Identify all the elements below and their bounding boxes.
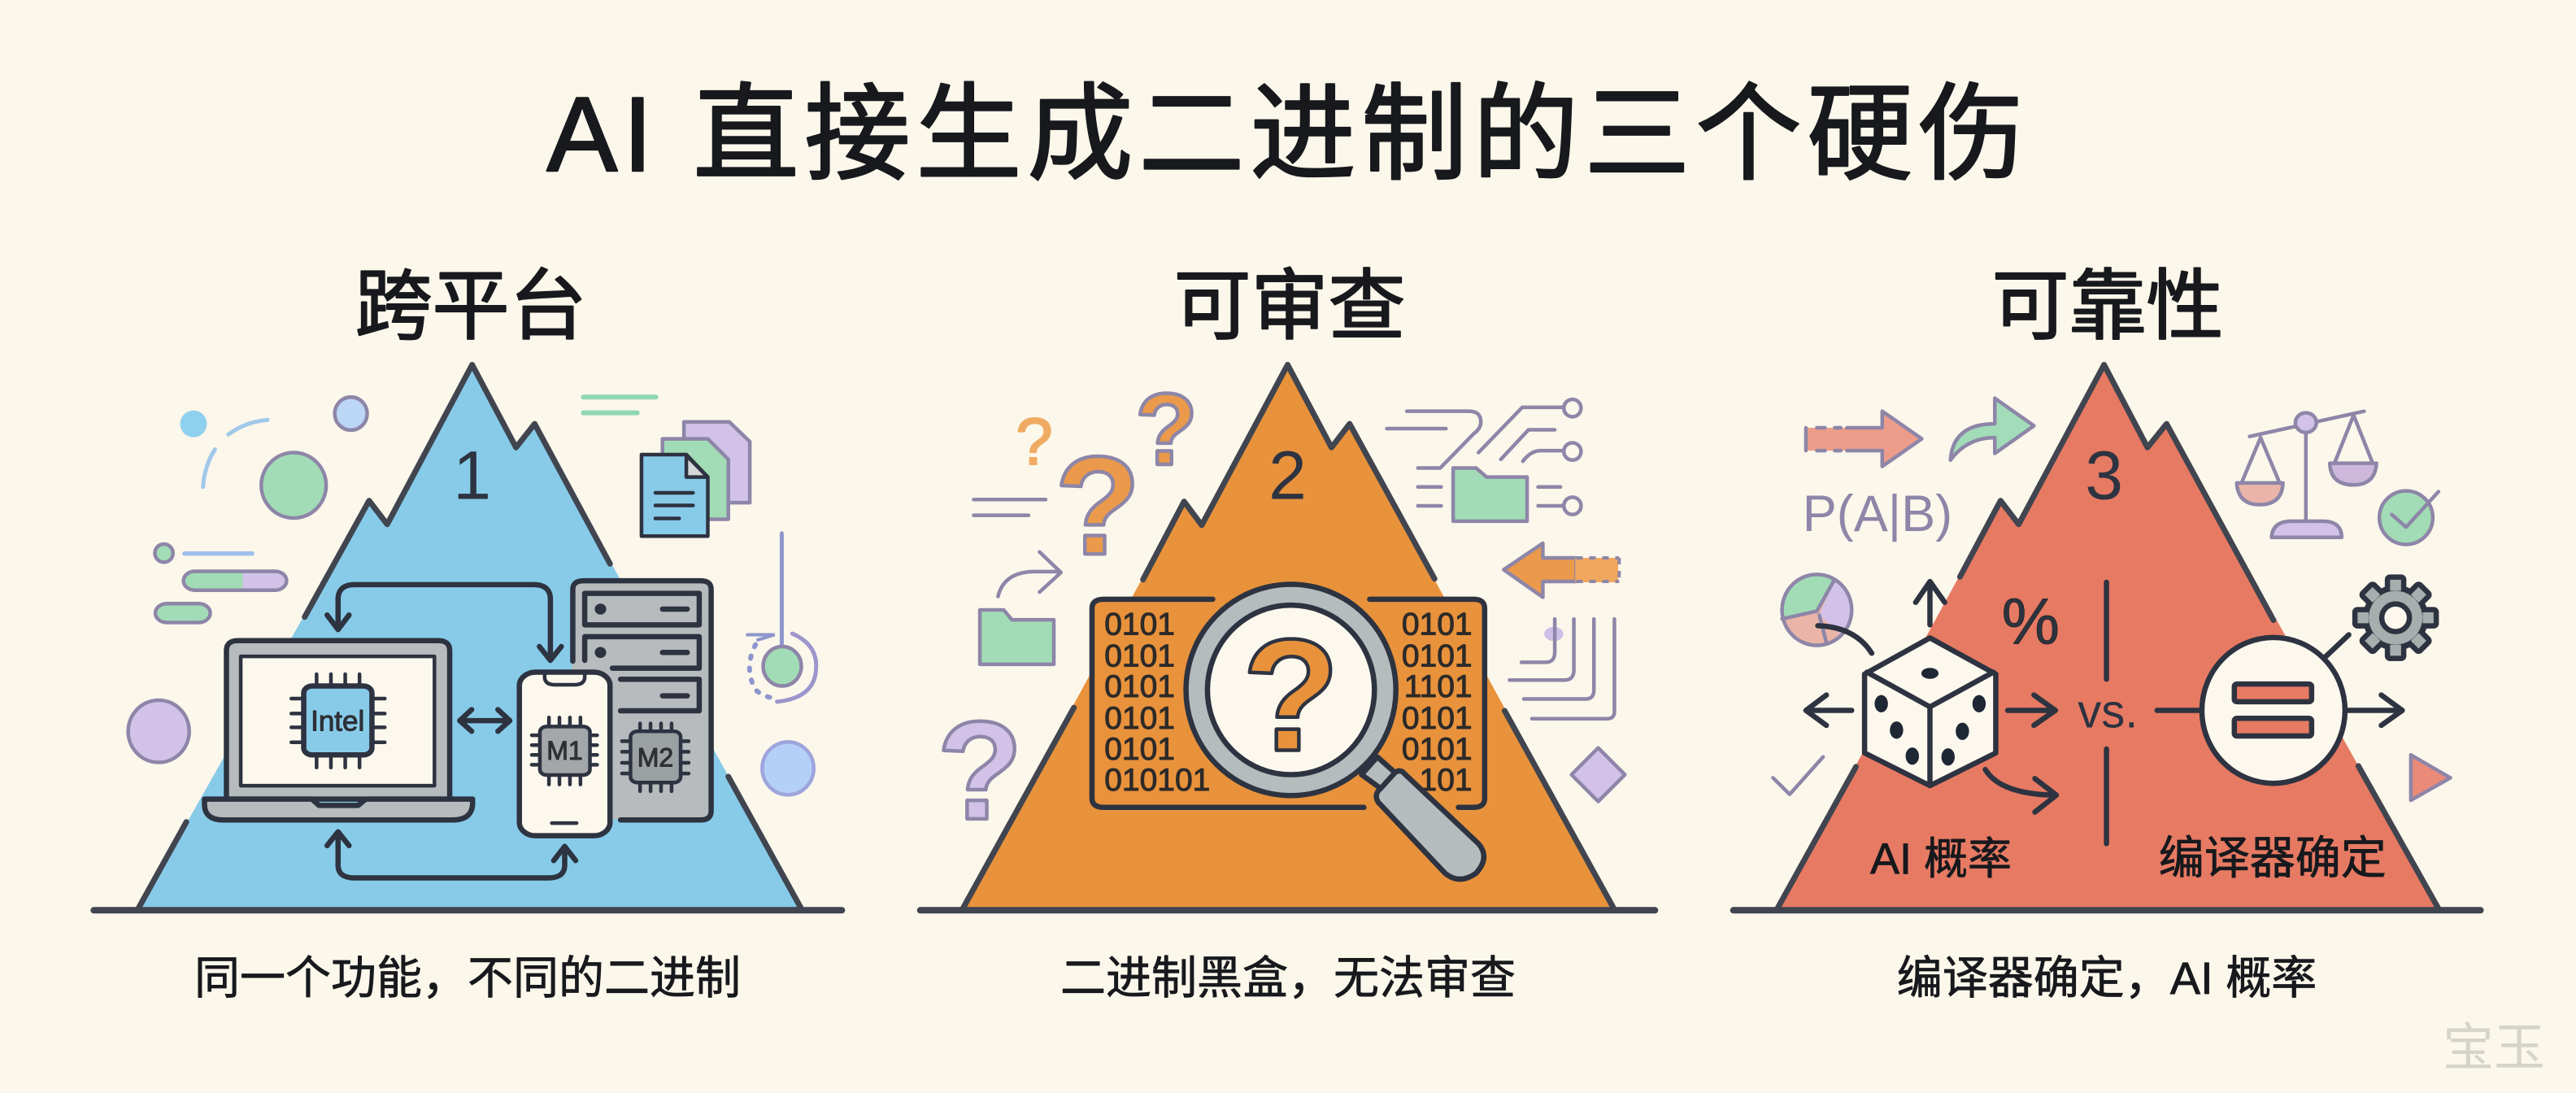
- decorative blue circle: [762, 742, 814, 795]
- vertical divider: [2104, 582, 2109, 843]
- heading: reliability: 可靠性: [1991, 263, 2224, 350]
- title: AI 直接生成二进制的三个硬伤: [546, 75, 2025, 194]
- number 2: 2: [1268, 437, 1307, 513]
- question marks: ?: [1055, 428, 1141, 584]
- decorative check: [1773, 757, 1823, 795]
- mountain 3: [1734, 364, 2481, 910]
- binary panel: 0101: [1104, 638, 1175, 673]
- percent sign: %: [2002, 586, 2060, 658]
- binary panel: 0101: [1104, 669, 1175, 704]
- binary panel: 0101: [1402, 701, 1473, 736]
- label: compiler deterministic: 编译器确定: [2159, 833, 2387, 884]
- binary panel: 0101: [1402, 607, 1473, 642]
- green lines: [583, 397, 656, 413]
- number 1: 1: [453, 437, 491, 513]
- circuit traces and folder: [1387, 399, 1581, 521]
- watermark: 宝玉: [2443, 1020, 2545, 1077]
- caption: auditability: 二进制黑盒，无法审查: [1060, 952, 1516, 1004]
- binary panel: [1092, 599, 1485, 808]
- magnifying glass: [1186, 584, 1484, 879]
- panel: reliability mountain: [1734, 364, 2481, 910]
- decorative pills: [154, 544, 286, 622]
- icon: gear: [2355, 577, 2436, 659]
- mountain 2: [920, 364, 1655, 910]
- pie chart: [1781, 574, 1872, 653]
- question marks: ?: [1016, 405, 1053, 479]
- question marks: ?: [938, 693, 1023, 849]
- binary panel: 0101: [1104, 607, 1175, 642]
- panel: cross-platform mountain: [94, 364, 842, 910]
- decorative lilac circle: [128, 700, 189, 763]
- equals circle and arrows: [2157, 634, 2402, 783]
- icon: check circle: [2379, 491, 2439, 544]
- binary panel: 0101: [1402, 638, 1473, 673]
- laptop with Intel chip: Intel: [311, 705, 364, 737]
- arrows around dice: [1806, 581, 2056, 812]
- icon: document stack: [642, 422, 750, 536]
- green curved arrow: [1951, 398, 2034, 460]
- binary panel: 0101: [1104, 732, 1175, 767]
- decorative pendulum: [747, 533, 816, 702]
- icon: balance scale: [2237, 412, 2377, 538]
- heading: cross-platform: 跨平台: [355, 263, 587, 350]
- arrows between devices: [327, 585, 576, 878]
- orange left arrow: [1503, 543, 1619, 597]
- red right arrow: [1806, 412, 1921, 467]
- formula: P(A|B): [1803, 486, 1952, 542]
- server with M2 chip: M2: [637, 742, 673, 772]
- binary panel: 1101: [1404, 669, 1473, 704]
- decorative diamond: [1572, 748, 1625, 802]
- magnifying glass: ?: [1242, 606, 1339, 784]
- phone with M1 chip: [520, 673, 610, 836]
- phone with M1 chip: M1: [546, 736, 583, 765]
- laptop with Intel chip: [204, 641, 472, 820]
- icon: dice: [1865, 638, 1995, 786]
- caption: cross-platform: 同一个功能，不同的二进制: [194, 952, 741, 1004]
- decorative circles and arcs, upper left: [181, 397, 368, 518]
- caption: reliability: 编译器确定，AI 概率: [1897, 952, 2317, 1004]
- label: AI probability: AI 概率: [1870, 835, 2012, 884]
- question marks: ?: [1135, 373, 1198, 486]
- mountain 1: [94, 364, 842, 910]
- binary panel: 0101: [1104, 701, 1175, 736]
- server with M2 chip: [572, 581, 711, 820]
- binary panel: 0101: [1402, 732, 1473, 767]
- question marks: [938, 373, 1198, 849]
- decorative nested lines: [1509, 619, 1614, 719]
- heading: auditable: 可审查: [1173, 263, 1406, 350]
- decorative triangle: [2411, 755, 2451, 800]
- icon: left folder: [980, 610, 1054, 664]
- binary panel: 101: [1420, 763, 1473, 798]
- number 3: 3: [2085, 437, 2123, 513]
- binary panel: 010101: [1104, 763, 1210, 798]
- panel: auditability mountain: [920, 364, 1655, 910]
- vs label: vs.: [2078, 685, 2138, 738]
- decorative lines and arrow: [973, 499, 1061, 596]
